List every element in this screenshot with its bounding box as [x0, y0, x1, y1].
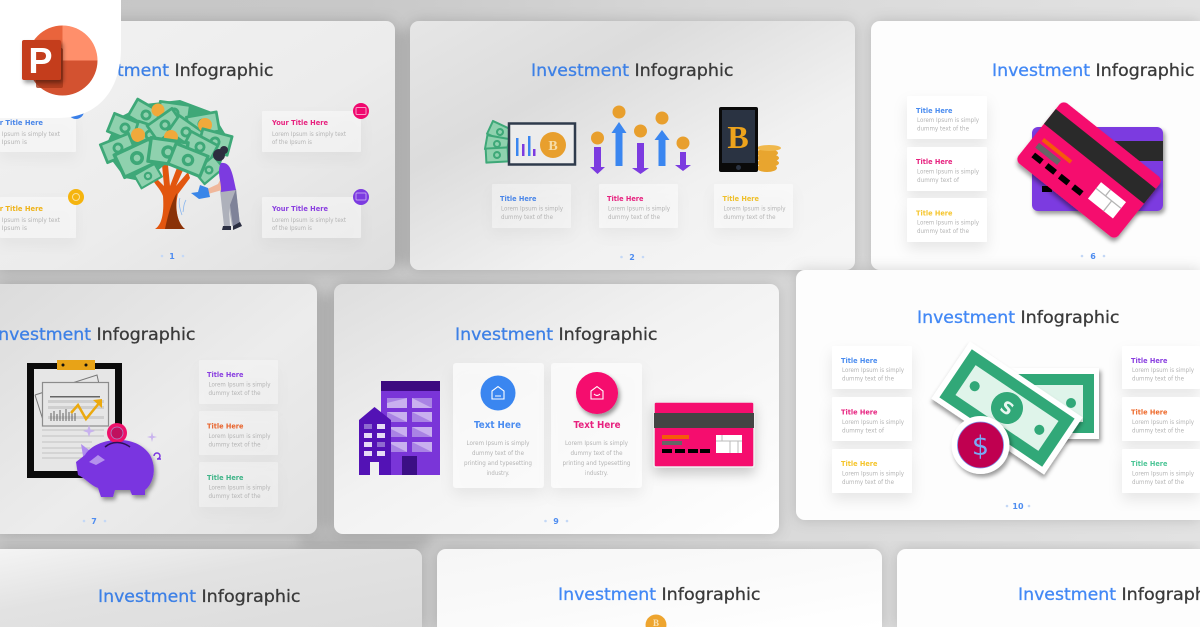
page number 2: 2 [629, 253, 635, 262]
text box: blue title: Lorem Ipsum is simply [842, 367, 904, 374]
slide 10 title: Infographic [1020, 308, 1120, 328]
badge: PowerPoint logo tab [0, 0, 121, 118]
bottom left title: Infographic [202, 587, 300, 607]
panel: text here pink: industry. [585, 470, 608, 477]
text box: your title pink: Your Title Here [271, 118, 328, 127]
text box: blue title: dummy text of the [917, 126, 969, 132]
text box: your title blue [0, 111, 76, 152]
panel: text here pink: printing and typesetting [562, 460, 631, 467]
text box: yellow title: Lorem Ipsum is simply [724, 206, 786, 212]
page number 9 [544, 517, 568, 526]
bottom right card [897, 549, 1200, 627]
icon: purple card [1032, 127, 1163, 211]
text box: yellow title [907, 198, 987, 242]
slide 10 title [917, 308, 1120, 328]
panel: slide 7 piggy bank [0, 284, 317, 534]
text box: purple title [199, 360, 278, 404]
text box: orange title: Title Here [207, 422, 244, 430]
icon: cash and monitor [484, 120, 575, 164]
icon: cash and monitor: B [548, 139, 558, 154]
text box: orange title: dummy text of the [1132, 428, 1184, 434]
text box: blue title: dummy text of the [501, 214, 553, 221]
text box: your title purple: Your Title Here [271, 204, 328, 213]
panel: text here pink: Text Here [574, 420, 620, 431]
panel: text here pink: Lorem Ipsum is simply [565, 440, 628, 447]
bottom left title: Investment [98, 587, 196, 607]
bottom left card [0, 549, 422, 627]
text box: yellow title: Title Here [916, 208, 952, 218]
bottom right title [1018, 585, 1200, 605]
text box: purple title: Title Here [207, 370, 244, 379]
text box: orange title: Title Here [1131, 408, 1168, 416]
panel: text here pink [551, 363, 642, 488]
slide 2 title: Infographic [634, 61, 734, 81]
text box: orange title [1122, 397, 1200, 441]
text box: yellow title [832, 449, 912, 493]
slide 1 card [0, 21, 395, 270]
slide 9 title: Investment [455, 325, 553, 345]
slide 2 title [531, 61, 734, 81]
slide 7 title [0, 325, 196, 345]
text box: yellow title: dummy text of the [917, 228, 969, 235]
icon: piggy bank [76, 423, 161, 497]
text box: yellow title: Title Here [722, 194, 759, 203]
text box: blue title: Title Here [916, 106, 952, 115]
page number 6: 6 [1090, 252, 1096, 261]
page number 2 [620, 253, 644, 262]
text box: pink title: Lorem Ipsum is simply [608, 206, 670, 212]
page number 6 [1081, 252, 1105, 261]
text box: green title: dummy text of the [1132, 479, 1184, 486]
text box: purple title: Lorem Ipsum is simply [208, 382, 271, 388]
slide 10 card [796, 270, 1200, 520]
icon: dollar coin: $ [972, 431, 989, 462]
text box: your title pink: Lorem Ipsum is simply text [272, 131, 347, 138]
panel: text here blue: printing and typesetting [464, 460, 532, 467]
text box: pink title [832, 397, 912, 441]
text box: your title yellow [0, 197, 76, 238]
icon: dollar coin [952, 416, 1010, 474]
text box: green title: Lorem Ipsum is simply [1132, 470, 1194, 478]
bottom center title: Infographic [662, 585, 760, 605]
icon: money tree [99, 97, 234, 229]
slide 1 title [71, 61, 274, 81]
panel: slide 6 credit cards [871, 21, 1200, 270]
icon: phone and coins [719, 107, 781, 172]
text box: blue title: Lorem Ipsum is simply [917, 117, 979, 124]
text box: purple title: Title Here [1131, 356, 1168, 365]
text box: your title pink [262, 111, 361, 152]
panel: text here blue: dummy text of the [472, 450, 524, 457]
icon: person watering [179, 146, 242, 230]
page number 1 [161, 252, 184, 261]
text box: pink title: Title Here [916, 157, 952, 166]
text box: yellow title: Lorem Ipsum is simply [917, 220, 979, 226]
slide 6 title: Investment [992, 61, 1090, 81]
panel: text here blue: industry. [486, 470, 510, 477]
icon: crypto arrows [590, 106, 691, 174]
icon: purple buildings [359, 381, 440, 475]
icon: blue circle [480, 376, 516, 410]
bottom left title [98, 587, 300, 607]
slide 10 title: Investment [917, 308, 1015, 328]
slide 2 title: Investment [531, 61, 629, 81]
text box: your title purple: Lorem Ipsum is simply text [272, 217, 347, 224]
text box: pink title [907, 147, 987, 191]
text box: pink title: dummy text of [917, 177, 960, 184]
text box: pink title: Lorem Ipsum is simply [917, 168, 979, 176]
slide 9 card [334, 284, 779, 534]
slide 6 title: Infographic [1096, 61, 1194, 81]
text box: purple title: dummy text of the [208, 390, 261, 397]
text box: blue title: Title Here [500, 194, 536, 203]
bottom right title: Investment [1018, 585, 1116, 605]
text box: purple title [1122, 346, 1200, 389]
panel: text here pink: dummy text of the [570, 450, 623, 457]
text box: pink title [599, 184, 678, 228]
text box: green title: Lorem Ipsum is simply [208, 484, 271, 492]
slide 7 card [0, 284, 317, 534]
text box: yellow title [714, 184, 793, 228]
panel: slide 10 dollar bills [796, 270, 1200, 520]
text box: blue title: Title Here [841, 356, 878, 365]
slide 2 card [410, 21, 855, 270]
text box: green title [199, 462, 278, 507]
panel: slide bottom center [437, 549, 882, 627]
icon: pink credit card [654, 402, 754, 467]
text box: blue title [832, 346, 912, 389]
text box: pink title: Lorem Ipsum is simply [842, 419, 904, 426]
text box: yellow title: dummy text of the [724, 214, 776, 221]
text box: blue title [492, 184, 571, 228]
panel: text here blue [453, 363, 544, 488]
text box: your title purple [262, 197, 361, 238]
slide 1 title: Investment [71, 61, 169, 81]
page number 7 [83, 517, 106, 526]
text box: green title: dummy text of the [208, 493, 261, 500]
bottom center title [558, 585, 760, 605]
slide 6 title [992, 61, 1194, 81]
page number 7: 7 [91, 517, 97, 526]
text box: orange title: Lorem Ipsum is simply [208, 433, 271, 440]
panel: slide 9 building [334, 284, 779, 534]
text box: yellow title: Lorem Ipsum is simply [842, 470, 904, 478]
slide 7 title: Infographic [96, 325, 196, 345]
text box: purple title: dummy text of the [1132, 376, 1184, 382]
page number 9: 9 [553, 517, 559, 526]
icon: clipboard report [27, 360, 122, 478]
text box: green title: Title Here [1131, 459, 1168, 468]
text box: green title: Title Here [207, 473, 244, 482]
panel: text here blue: Lorem Ipsum is simply [466, 440, 530, 447]
icon: front dollar bill [931, 341, 1083, 475]
text box: purple title: Lorem Ipsum is simply [1132, 367, 1194, 374]
icon: PowerPoint logo: P [28, 40, 53, 81]
icon: back dollar bill [1010, 368, 1099, 439]
bottom center title: Investment [558, 585, 656, 605]
icon: purple badge [353, 189, 369, 205]
text box: blue title: Lorem Ipsum is simply [501, 206, 563, 212]
page number 10: 10 [1012, 502, 1024, 511]
text box: your title purple: of the Ipsum is [272, 225, 312, 232]
text box: yellow title: dummy text of the [842, 479, 894, 486]
slide 9 title: Infographic [558, 325, 658, 345]
text box: blue title: dummy text of the [842, 376, 894, 382]
panel: slide 2 bitcoin [410, 21, 855, 270]
panel: slide bottom right [897, 549, 1200, 627]
text box: orange title [199, 411, 278, 455]
page number 1: 1 [169, 252, 175, 261]
icon: coin [646, 614, 666, 627]
text box: pink title: Title Here [607, 194, 644, 203]
text box: pink title: dummy text of [842, 428, 885, 434]
text box: pink title: dummy text of the [608, 214, 660, 221]
panel: slide bottom left [0, 549, 422, 627]
panel: text here blue: Text Here [474, 420, 521, 431]
icon: yellow badge [68, 189, 84, 205]
icon: phone and coins: B [727, 119, 749, 155]
text box: yellow title: Title Here [841, 459, 878, 468]
darker gaps between cards [300, 30, 430, 547]
text box: orange title: Lorem Ipsum is simply [1132, 419, 1194, 426]
icon: pink circle [576, 372, 618, 414]
text box: blue title [907, 96, 987, 139]
slide 1 title: Infographic [174, 61, 274, 81]
icon: front dollar bill: S [996, 397, 1017, 421]
bottom center card [437, 549, 882, 627]
icon: pink card [1015, 100, 1163, 240]
icon: blue badge [68, 103, 84, 119]
text box: pink title: Title Here [841, 408, 878, 416]
slide 9 title [455, 325, 658, 345]
text box: orange title: dummy text of the [208, 442, 261, 448]
slide 6 card [871, 21, 1200, 270]
page number 10 [1006, 502, 1030, 511]
panel: slide 1 tree [0, 21, 395, 270]
icon: pink badge [353, 103, 369, 119]
text box: green title [1122, 449, 1200, 493]
text box: your title pink: of the Ipsum is [272, 139, 312, 146]
